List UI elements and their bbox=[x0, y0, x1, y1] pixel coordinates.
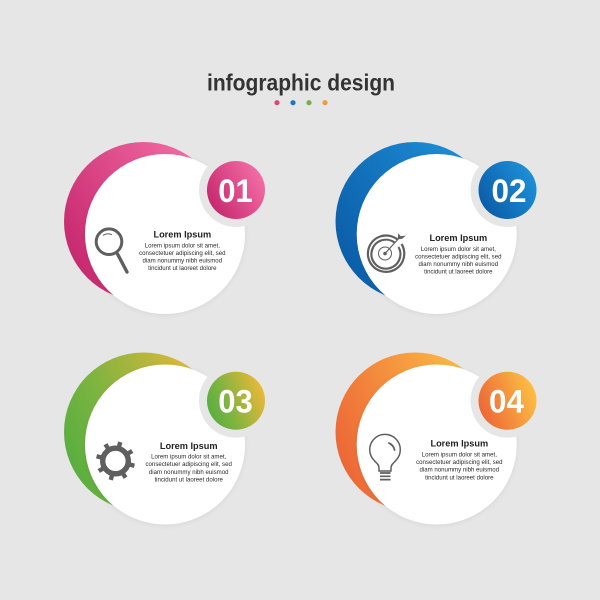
text block 01: Lorem Ipsum bbox=[153, 230, 211, 240]
text block 02: Lorem ipsum dolor sit amet, bbox=[421, 246, 496, 253]
text block 04: Lorem ipsum dolor sit amet, bbox=[422, 452, 497, 458]
badge halo 03 bbox=[199, 364, 273, 438]
crescent 03 bbox=[64, 352, 223, 512]
badge 03 bbox=[207, 372, 265, 430]
panel: step 02 bbox=[336, 142, 544, 314]
decorative colored dots bbox=[274, 100, 328, 105]
icon: target with dart bbox=[368, 234, 405, 272]
icon: gear bbox=[96, 442, 135, 480]
text block 04: tincidunt ut laoreet dolore bbox=[425, 474, 494, 481]
text block 01: diam nonummy nibh euismod bbox=[142, 258, 222, 265]
crescent 04 bbox=[336, 352, 494, 512]
text block 03 bbox=[146, 441, 232, 483]
badge 04 bbox=[478, 372, 536, 430]
crescent 02 bbox=[336, 142, 494, 301]
white circle 02 bbox=[357, 154, 517, 314]
title: infographic design bbox=[207, 70, 395, 96]
badge halo 01 bbox=[199, 153, 273, 227]
text block 03: Lorem Ipsum bbox=[160, 441, 218, 451]
number 04: 04 bbox=[489, 384, 524, 420]
text block 02: tincidunt ut laoreet dolore bbox=[424, 269, 493, 276]
text block 04 bbox=[416, 439, 502, 481]
text block 03: consectetuer adipiscing elit, sed bbox=[146, 461, 232, 468]
number 03: 03 bbox=[218, 384, 253, 420]
text block 02 bbox=[415, 233, 501, 276]
badge halo 02 bbox=[470, 153, 544, 227]
white circle 01 bbox=[85, 154, 245, 314]
badge 01 bbox=[207, 161, 265, 219]
number 01: 01 bbox=[218, 173, 253, 209]
panel: step 01 bbox=[64, 142, 273, 314]
text block 02: diam nonummy nibh euismod bbox=[418, 261, 498, 268]
text block 03: diam nonummy nibh euismod bbox=[149, 469, 229, 476]
badge halo 04 bbox=[470, 364, 544, 438]
text block 04: Lorem Ipsum bbox=[430, 439, 488, 449]
text block 04: consectetuer adipiscing elit, sed bbox=[416, 459, 502, 466]
panel: step 03 bbox=[64, 352, 273, 524]
text block 03: tincidunt ut laoreet dolore bbox=[154, 476, 224, 483]
icon: light bulb bbox=[370, 434, 400, 480]
text block 01: tincidunt ut laoreet dolore bbox=[148, 265, 217, 272]
crescent 01 bbox=[64, 142, 223, 301]
number 02: 02 bbox=[492, 173, 526, 209]
panel: step 04 bbox=[336, 352, 544, 524]
text block 04: diam nonummy nibh euismod bbox=[419, 467, 499, 474]
text block 01 bbox=[139, 230, 225, 272]
text block 02: consectetuer adipiscing elit, sed bbox=[415, 253, 501, 260]
text block 03: Lorem ipsum dolor sit amet, bbox=[151, 454, 227, 461]
white circle 03 bbox=[85, 364, 245, 524]
badge 02 bbox=[478, 161, 536, 219]
text block 01: consectetuer adipiscing elit, sed bbox=[139, 250, 225, 257]
text block 02: Lorem Ipsum bbox=[429, 233, 487, 243]
white circle 04 bbox=[357, 364, 517, 524]
icon: magnifying glass bbox=[96, 229, 127, 272]
text block 01: Lorem ipsum dolor sit amet, bbox=[145, 242, 220, 250]
